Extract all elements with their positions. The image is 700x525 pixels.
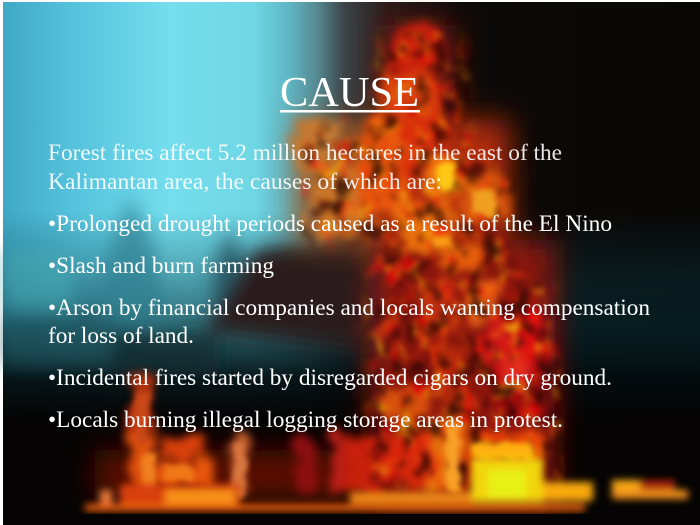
bullet: protest: •Locals burning illegal logging storage areas in protest. bbox=[48, 407, 563, 432]
intro text bbox=[48, 140, 562, 194]
flames: mottled embers bbox=[300, 30, 565, 500]
flames: mid tones bbox=[132, 23, 545, 493]
title: CAUSE bbox=[280, 69, 419, 116]
silhouetted trees and smoke bbox=[3, 195, 370, 375]
bullet: drought: •Prolonged drought periods caused as a result of the El Nino bbox=[48, 211, 612, 236]
bullet: arson: •Arson by financial companies and locals wanting compensation bbox=[48, 295, 650, 320]
flames: ground line bbox=[85, 458, 688, 511]
intro text: Forest fires affect 5.2 million hectares in the east of the bbox=[48, 140, 562, 165]
ground shadow bbox=[3, 514, 700, 525]
flames: bright cores bbox=[135, 163, 532, 498]
intro text: Kalimantan area, the causes of which are: bbox=[48, 169, 442, 194]
bullet: incidental fires: •Incidental fires started by disregarded cigars on dry ground. bbox=[48, 365, 612, 390]
bullet: arson bbox=[48, 295, 650, 348]
bullet: arson: for loss of land. bbox=[48, 323, 194, 348]
bullet: farming: •Slash and burn farming bbox=[48, 253, 274, 278]
flames: dim outer glow bbox=[95, 25, 555, 505]
